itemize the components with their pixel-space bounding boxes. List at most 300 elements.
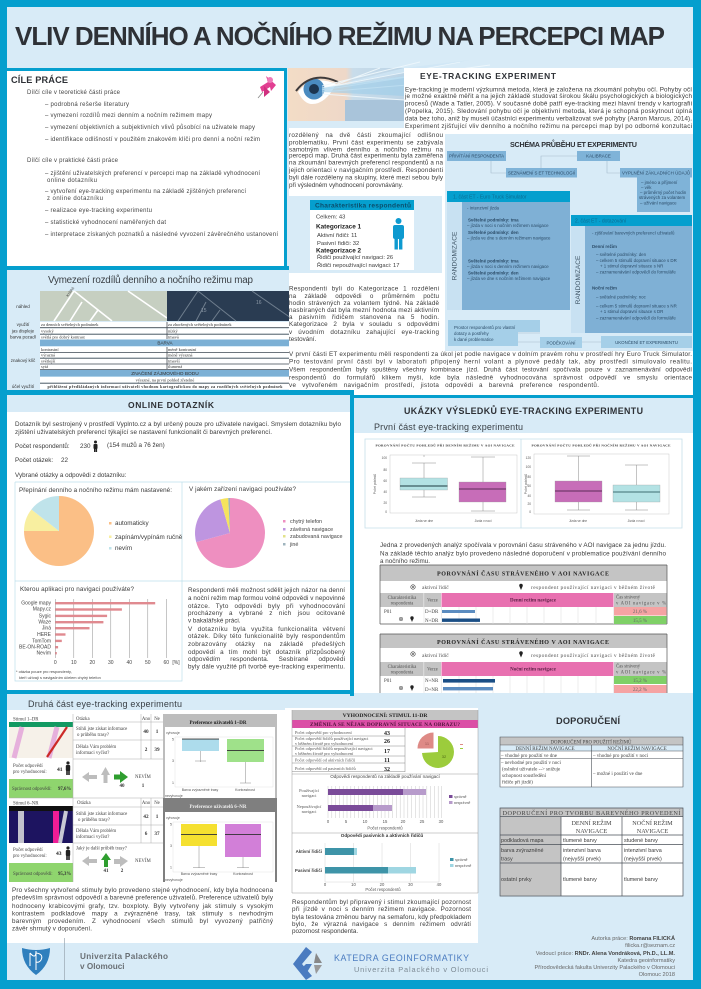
first ET part: Světelné podmínky: tma	[468, 218, 519, 222]
answers table: 43	[384, 731, 390, 737]
panel: charakteristika respondentů: Celkem: 43	[316, 214, 345, 220]
text block: experiment parts: samotným vlivem denního a nočního režimu na	[289, 146, 443, 153]
text block: intro: data bez toho, aniž by museli účastníci experimentu verbalizovat své pohyby (Aaron Marcus, 2014).	[405, 116, 692, 122]
text block: free answers	[188, 587, 346, 670]
stimulus 1-DR row: 1	[156, 729, 159, 735]
boxplot: denní režim: 40	[383, 490, 387, 494]
answers table: 11	[384, 758, 390, 764]
table: AOI noční režim: 22,2 %	[633, 688, 647, 693]
bar chart: drivers: Počet respondentů	[365, 887, 401, 892]
table: AOI denní režim	[380, 565, 667, 624]
text block: praktická část: – zjištění uživatelských preferencí v percepci map na základě vyhodnocení	[45, 171, 260, 177]
stimulus 6-NR row: Ano	[142, 801, 151, 806]
text block: stimuli evaluation	[12, 887, 274, 932]
boxplot: denní režim: 0	[385, 510, 387, 514]
stimulus 6-NR row: Ne	[154, 801, 160, 806]
heading: vymezení rozdílů: Vymezení rozdílů denního a nočního režimu map	[48, 275, 254, 286]
answers table: Počet odpovědí pro vyhodnocení	[295, 730, 352, 735]
second ET part: - zjišťování barevných preferencí uživatelů	[592, 230, 675, 236]
bar chart: drivers: 30	[408, 882, 413, 887]
text block: attention stimulus: při jízdě v noci s denním režimem navigace. Pozornost	[292, 906, 471, 913]
bar chart: navigation use: 5	[345, 819, 348, 824]
stimulus 1-DR row	[9, 714, 163, 798]
table: AOI noční režim: 15,2 %	[633, 679, 647, 684]
boxplot: preference 1-DR: 1	[172, 781, 174, 785]
closing boxes: k dané problematice	[454, 337, 494, 342]
bar chart: aplikace: 50	[145, 660, 151, 666]
comparison table: tlumená	[168, 364, 182, 369]
bar chart: aplikace: Waze	[38, 620, 51, 626]
text block: first part procedure	[289, 351, 692, 389]
boxplot: preference 6-NR	[163, 798, 277, 882]
bar chart: drivers: nesprávně	[455, 863, 471, 868]
bar chart: navigation use: navigaci	[302, 793, 317, 798]
answers table: 17	[384, 749, 390, 755]
text block: experiment parts	[288, 132, 444, 189]
boxplot: noční režim: Jízda ve dne	[569, 519, 587, 523]
table: barevné provedení: (nejvyšší prvek)	[624, 856, 662, 862]
answers table: v běžném životě pro vyhodnocení	[295, 751, 354, 756]
stimulus 6-NR row: 95,3%	[58, 872, 71, 877]
text block: kategorizace: Respondenti byli do Kategorizace 1 rozděleni	[289, 285, 439, 292]
step boxes: – jméno a příjmení	[641, 180, 678, 185]
pie chart: correct answers	[418, 732, 463, 768]
stimulus 6-NR row: o průběhu trasy?	[78, 817, 110, 823]
step boxes: – průměrný počet hodin	[640, 190, 687, 195]
boxplot: denní režim: Počet pohledů	[373, 474, 377, 494]
bar chart: drivers	[295, 832, 471, 892]
text block: attention stimulus: byla testována změnou barvy na semaforu, kdy předpokladem	[292, 914, 471, 921]
bar chart: drivers: 10	[351, 882, 356, 887]
pie chart: zařízení: chytrý telefon	[290, 519, 322, 525]
table: barevné provedení: trasy	[501, 856, 513, 862]
table: barevné provedení: intenzivní barva	[624, 848, 662, 854]
comparison table: výrazné, na první pohled zřetelné	[136, 378, 194, 384]
text block: free answers: Respondenti měli možnost sdělit jejich názor na denní	[188, 587, 345, 594]
table: barevné provedení: intenzivní barva	[563, 848, 601, 854]
table: AOI noční režim: Verze	[427, 668, 438, 672]
boxplot: preference 6-NR: vyhovuje	[166, 816, 180, 820]
text block: experiment parts: percepci map. Druhá část experimentu byla zaměřena	[289, 153, 443, 160]
stimulus 6-NR row: 43	[56, 851, 62, 857]
first ET part: 1. část ET - Euro Truck Simulator	[453, 194, 527, 200]
bar chart: aplikace: 60	[164, 660, 169, 666]
text block: stimuli evaluation: především správnost odpovědí a barevné preference uživatelů. Preference uživatelů byly	[12, 894, 274, 902]
pie chart: zařízení: zabudovaná navigace	[290, 534, 342, 540]
table: použití režimů: NOČNÍ REŽIM NAVIGACE	[607, 746, 667, 752]
table: AOI denní režim: POROVNÁNÍ ČASU STRÁVENÉHO V AOI NAVIGACE	[437, 570, 609, 578]
pie chart: zařízení: závěsná navigace	[290, 527, 333, 533]
comparison table: vysoký	[41, 328, 54, 334]
text block: experiment parts: při výsledném vyhodnocení porovnávány.	[289, 182, 403, 189]
boxplot: noční režim: 100	[526, 465, 531, 469]
text block: free answers: otázek. Díky této funkcionalitě byly respondentům	[188, 632, 345, 640]
icon: man	[66, 761, 70, 775]
panel: doporučení	[500, 715, 683, 978]
closing boxes: UKONČENÍ ET EXPERIMENTU	[615, 340, 678, 345]
comparison table	[10, 304, 291, 389]
table: AOI noční režim: P01	[384, 679, 392, 684]
table: AOI noční režim: respondent používající navigaci v běžném životě	[531, 653, 656, 659]
stimulus screenshot 1-DR	[9, 718, 73, 758]
respondents count: 230	[80, 443, 91, 450]
first ET part	[447, 191, 570, 310]
panel: charakteristika respondentů	[289, 196, 442, 273]
text block: free answers: odpovědím respondenta. Sesbírané odpovědi	[188, 656, 345, 663]
text block: attention stimulus: bylo, že výrazná navigace s denním režimem odvrátí	[292, 921, 471, 928]
table: AOI noční režim: Čas strávený	[616, 664, 641, 670]
answers table: Počet odpovědí od aktivních řidičů	[295, 758, 356, 762]
stimulus 6-NR row: Jaký je další průběh trasy?	[76, 846, 127, 852]
boxplot: preference 1-DR: nevyhovuje	[165, 794, 183, 798]
text block: stimuli evaluation: barevným provedením. Z vyhodnocení všech stimulů byl vyvozený patřičný	[12, 917, 274, 925]
footer logos	[22, 938, 488, 980]
panel: online dotazník	[7, 390, 354, 696]
bar chart: aplikace: 0	[54, 660, 57, 666]
boxplot: preference 6-NR: Preference uživatelů 6–NR	[189, 804, 247, 810]
step boxes: – věk	[641, 185, 652, 190]
bar chart: drivers: Odpovědi pasivních a aktivních řidičů	[341, 832, 423, 838]
boxplot: denní režim: 60	[383, 479, 387, 483]
boxplot: denní režim: POROVNÁNÍ POČTU POHLEDŮ PŘI DENNÍM REŽIMU V AOI NAVIGACE	[376, 442, 515, 448]
subheading: první část: První část eye-tracking experimentu	[374, 422, 523, 432]
text block: kategorizace	[289, 285, 439, 343]
logo: Univerzita Palackého: v Olomouci	[80, 962, 125, 971]
table: barevné provedení	[500, 808, 683, 896]
table: AOI denní režim: 21,6 %	[633, 610, 647, 615]
boxplot: preference 1-DR: vyhovuje	[166, 731, 180, 735]
text block: kategorizace: hodin strávených za volantem týdně. Na základě	[289, 300, 439, 307]
comparison table: BARVA	[157, 340, 174, 346]
text block: praktická část: – vytvoření eye-tracking experimentu na základě zjištěných preferencí	[45, 189, 246, 195]
text block: experiment parts: na zkoumání barevných preferencí respondentů a na	[289, 159, 443, 167]
comparison table: méně kontrastní	[168, 347, 197, 352]
text block: teoretická část: – podrobná rešerše literatury	[45, 102, 129, 108]
stimulus 1-DR row: 2	[145, 747, 148, 753]
boxplot: denní režim	[373, 442, 517, 523]
table: barevné provedení: NAVIGACE	[637, 828, 668, 835]
text block: AOI analysis: Jedna z provedených analýz spočívala v porovnání času stráveného v AOI navigace za jednu jízdu.	[380, 542, 666, 549]
diagram: schéma průběhu ET experimentu	[445, 135, 693, 351]
text block: description	[15, 421, 341, 436]
stimulus 6-NR row: 42	[143, 814, 149, 820]
bar chart: aplikace: Kterou aplikaci pro navigaci používáte?	[20, 586, 134, 593]
comparison table: tmavá	[168, 335, 179, 340]
comparison table: za denních světelných podmínek	[41, 322, 99, 327]
bar chart: aplikace: kteří užívají s navigačním účelem chytrý telefon	[19, 675, 101, 680]
heading: eye-tracking experiment: EYE-TRACKING EXPERIMENT	[420, 71, 557, 81]
text block: free answers: byly dále využité při tvorbě eye-tracking experimentu.	[188, 664, 345, 670]
table: použití režimů: – vhodné pro použití v noci	[592, 754, 649, 759]
bar chart: navigation use: Nepoužívající	[297, 804, 322, 809]
first ET part: Světelné podmínky: den	[468, 230, 519, 235]
boxplot: denní režim: Jízda v noci	[475, 519, 492, 523]
stimulus screenshot 1-DR: Stimul 1–DR	[13, 718, 39, 722]
text block: praktická část: z online dotazníku	[47, 196, 103, 202]
boxplot: preference 6-NR: Barva zvýrazněné trasy	[181, 872, 218, 876]
boxplot: noční režim: POROVNÁNÍ POČTU POHLEDŮ PŘI NOČNÍM REŽIMU V AOI NAVIGACE	[532, 442, 671, 448]
arrows	[82, 767, 151, 789]
bar chart: aplikace: [%]	[172, 660, 180, 666]
bar chart: aplikace: Jiná	[42, 626, 51, 632]
boxplot: noční režim	[524, 442, 671, 523]
table: AOI noční režim	[380, 634, 667, 693]
bar chart: navigation use: nesprávně	[454, 800, 470, 805]
comparison table: za zhoršených světelných podmínek	[168, 322, 232, 327]
stimulus 1-DR row: 39	[154, 747, 160, 753]
credits: Přírodovědecká fakulta Univerzity Palackého v Olomouci	[534, 965, 675, 971]
map preview: day	[40, 286, 167, 321]
stimulus 6-NR row: 37	[154, 831, 160, 837]
second ET part: + 1 stimul dopravní situace s DR	[600, 309, 663, 314]
bar chart: navigation use: Odpovědi respondentů na základě používání navigací	[330, 773, 441, 779]
table: použití režimů: – vhodné pro použití ve dne	[500, 754, 558, 759]
stimulus 6-NR row	[9, 798, 163, 882]
comparison table: výrazná	[41, 352, 55, 358]
text block: free answers: V dotazníku byla využita funkcionalita větvení	[188, 626, 345, 633]
second ET part: 2. část ET - dotazování	[575, 218, 627, 224]
table: barevné provedení: DENNÍ REŽIM	[571, 819, 612, 827]
first ET part: – jízda v noci s nočním režimem navigace	[467, 223, 549, 228]
bar chart: aplikace: 40	[127, 660, 132, 666]
panel: vyhodnocení stimul 11-DR	[292, 710, 478, 935]
table: AOI denní režim: P01	[384, 610, 392, 615]
bar chart: drivers: správně	[455, 857, 468, 862]
pie chart: přepínání režimu	[19, 487, 183, 566]
credits: filicka.r@seznam.cz	[625, 943, 675, 949]
table: barevné provedení: tlumené barvy	[563, 838, 597, 844]
bar chart: aplikace: * otázka pouze pro respondenty,	[16, 669, 72, 674]
text block: intro	[404, 86, 692, 130]
panel: charakteristika respondentů: Aktivní řidiči: 11	[317, 233, 357, 239]
text block: free answers: v bakalářské práci.	[188, 618, 241, 624]
text block: intro: Eye-tracking je moderní výzkumná metoda, která je založena na zkoumání pohybu očí. Pohyby očí	[405, 86, 692, 94]
table: barevné provedení: barva zvýrazněné	[501, 848, 544, 854]
boxplot: noční režim: Jízda v noci	[628, 519, 645, 523]
text block: intro: (Popelka, 2015). Sledování pohybu očí je objektivní metoda, která je schopná poskytnout úplná	[405, 108, 692, 115]
bar chart: aplikace: Nevím	[37, 650, 51, 656]
text block: stimuli evaluation: kontrastem podkladové mapy a zvýrazněné trasy, tak stimuly s nevhodným	[12, 910, 273, 918]
boxplot frames	[365, 439, 682, 528]
second ET part: – světelné podmínky: noc	[596, 294, 647, 300]
comparison table: ZNAČENÍ ZÁJMOVÉHO BODU	[131, 370, 199, 377]
second ET part: – celkem 5 stimulů dopravní situace s NR	[596, 304, 677, 308]
arrows: NEVÍM	[135, 774, 151, 780]
text block: first part procedure: respondentů do formulářů klikem myši, kde byla následně vyhodnocována správnost odpovědí ve smyslu orientace	[289, 373, 692, 381]
stimulus 1-DR row: Otázka	[76, 717, 90, 722]
closing boxes: dotazy a postřehy	[454, 331, 489, 336]
arrows: NEVÍM	[135, 858, 151, 864]
boxplot: denní režim: Jízda ve dne	[415, 519, 433, 523]
pie chart: zařízení: V jakém zařízení navigaci používáte?	[189, 486, 296, 493]
boxplot: preference 1-DR: Preference uživatelů 1–DR	[189, 720, 247, 726]
bar chart: navigation use: 30	[439, 819, 444, 824]
text block: stimuli evaluation: Pro všechny vytvořené stimuly bylo provedeno stejné vyhodnocení, kdy byla hodnocena	[12, 887, 273, 894]
text block: kategorizace: testování.	[289, 336, 317, 343]
stimulus 6-NR row: Stihli jste získat informace	[76, 812, 127, 817]
boxplot: noční režim: 120	[526, 456, 531, 460]
boxplot: noční režim: 20	[527, 502, 531, 506]
boxplot: noční režim: 80	[527, 475, 531, 479]
bar chart: navigation use: správně	[454, 794, 467, 799]
pie chart: correct answers: 32	[442, 754, 447, 759]
pie chart: přepínání režimu: automaticky	[115, 520, 149, 527]
bar chart: drivers: 20	[380, 882, 385, 887]
text block: AOI analysis: Na základě těchto analýz bylo provedeno následné doporučení v problematice používání denního	[380, 550, 666, 558]
stimulus 1-DR row: informaci vyčíst?	[76, 751, 109, 756]
table: AOI denní režim: D+DR	[425, 610, 439, 615]
bar chart: aplikace	[16, 586, 180, 680]
stimulus 1-DR row: 97,6%	[58, 787, 71, 792]
step boxes: SEZNÁMENÍ S ET TECHNOLOGIÍ	[508, 170, 576, 176]
icon: man	[66, 846, 70, 860]
boxplot: preference 6-NR: nevyhovuje	[165, 878, 183, 882]
bar chart: aplikace: Mapy.cz	[33, 606, 51, 612]
bar chart: navigation use: Počet respondentů	[367, 826, 403, 830]
text block: description: zjištění uživatelských preferencí týkající se nastavení funkcionalit či barevných preferencí.	[15, 429, 272, 436]
text block: attention stimulus: pozornost respondenta.	[292, 928, 358, 935]
pie chart: correct answers: 11	[425, 741, 430, 746]
text block: first part procedure: Všem respondentům byly spuštěny všechny kombinace jízd. Druhá část testování spočívala pouze v zaznamenávání odpovědí	[289, 365, 692, 373]
subheading: druhá část: Druhá část eye-tracking experimentu	[28, 699, 182, 709]
table: AOI noční režim: aktivní řidič	[422, 653, 449, 659]
bar chart: aplikace: Google mapy	[21, 600, 51, 606]
table: AOI denní režim: respondenta	[391, 602, 414, 606]
boxplot: preference 1-DR: Kontrastnost	[235, 788, 255, 792]
text block: free answers: a noční režim map formou volné odpovědi v nepovinné	[188, 595, 345, 602]
stimulus 6-NR row: pro vyhodnocení:	[13, 854, 47, 859]
table: použití režimů: DOPORUČENÍ PRO POUŽITÍ REŽIMŮ	[551, 740, 632, 746]
text block: teoretická část: Dílčí cíle v teoretické části práce	[27, 90, 121, 96]
comparison table: jas displeje	[11, 328, 35, 334]
answers table: v běžném životě pro vyhodnocení	[295, 741, 354, 746]
panel: charakteristika respondentů: Charakteristika respondentů	[315, 202, 411, 210]
table: AOI noční režim: respondenta	[391, 670, 414, 676]
first ET part: – jízda ve dne s nočním režimem navigace	[467, 276, 551, 281]
boxplot: preference 1-DR: 3	[172, 759, 174, 763]
boxplot: noční režim: 0	[529, 510, 531, 514]
panel: vymezení rozdílů	[7, 267, 295, 395]
text block: experiment parts: rozdělený na dvě části zkoumající odlišnou	[289, 132, 443, 139]
second ET part: RANDOMIZACE	[575, 255, 582, 304]
comparison table: přiblížení předkládaných informací uživateli vhodnou kartografickou do mapy za rozdílných světelných podmínek	[48, 384, 283, 389]
credits: Autorka práce: Romana FILICKÁ	[591, 935, 675, 942]
answers table	[292, 728, 405, 773]
text block: intro: Experiment zjišťující vliv denního a nočního režimu na percepci map byl po odborné konzultaci	[405, 123, 692, 130]
text block: description: Dotazník byl sestrojený v prostředí Vyplnto.cz a byl určený pouze pro uživatele navigací. Smyslem dotazníku bylo	[15, 421, 341, 428]
map preview: day: Krátká	[66, 286, 76, 298]
step boxes: VYPLNĚNÍ ZÁKLADNÍCH ÚDAJŮ	[622, 170, 690, 176]
text block: kategorizace: nasbíraných dat byla mezní hodnota mezi aktivním	[289, 307, 439, 314]
panel: charakteristika respondentů: Pasivní řidiči: 32	[317, 241, 359, 247]
table: AOI denní režim: Denní režim navigace	[510, 598, 557, 604]
boxplot: preference 6-NR: 1	[170, 866, 172, 870]
second ET part: – světelné podmínky: den	[596, 252, 647, 257]
arrows	[82, 853, 151, 874]
text block: teoretická část	[27, 90, 260, 143]
text block: free answers: procházeny a vybrané z nich jsou ocitované	[188, 610, 345, 617]
text block: kategorizace: a pasivním řidičem stanovena na 5 hodin.	[289, 314, 439, 321]
second ET part: Noční režim	[592, 286, 617, 290]
heading: cíle práce: CÍLE PRÁCE	[11, 74, 68, 85]
stimulus 6-NR row: 6	[145, 831, 148, 837]
comparison table: méně výrazná	[168, 352, 193, 358]
table: použití režimů: – nevhodné pro použití v noci	[500, 761, 561, 766]
table: barevné provedení: studené barvy	[624, 838, 658, 844]
panel: eye-tracking experiment	[288, 68, 693, 395]
chart frames	[15, 482, 350, 681]
pie chart: přepínání režimu: zapínám/vypínám ručně	[115, 534, 183, 541]
boxplot: denní režim: 100	[382, 456, 387, 460]
stimulus 6-NR row: 1	[156, 814, 159, 820]
comparison table: světlá pro dobrý kontrast	[41, 335, 86, 340]
panel: cíle práce	[7, 68, 295, 270]
arrows: 2	[121, 869, 124, 874]
comparison table: náhled	[16, 304, 30, 309]
table: použití režimů	[500, 737, 683, 787]
text block: teoretická část: – vymezení rozdílů mezi denním a nočním režimem mapy	[45, 112, 212, 119]
boxplot: denní režim: 20	[383, 501, 387, 505]
table: barevné provedení: DOPORUČENÍ PRO TVORBU BAREVNÉHO PROVEDENÍ	[502, 809, 680, 817]
bar chart: aplikace: Sygic	[39, 614, 51, 620]
comparison table: účel využití	[12, 384, 35, 389]
text block: stimuli evaluation: závěr shrnutý v doporučení.	[12, 926, 92, 932]
text block: kategorizace: Kategorizace 2 byla v souladu s odpovědmi	[289, 321, 439, 328]
second ET part: Denní režim	[592, 244, 617, 249]
table: AOI denní režim: respondent používající navigaci v běžném životě	[531, 585, 656, 591]
text block: first part procedure: V první části ET experimentu měli respondenti za úkol jet podle navigace v dolním pravém rohu v prostředí hry Euro Truck Simulator.	[289, 351, 692, 358]
comparison table: nízký	[168, 328, 179, 334]
table: AOI denní režim: Čas strávený	[616, 594, 641, 600]
bar chart: navigation use: 25	[420, 819, 425, 824]
text block: first part procedure: Pro testování první části byl v laboratoři připojený herní volant a plynové pedály tak, aby prostředí simulovalo realitu.	[289, 359, 692, 366]
pie chart: zařízení: jiné	[289, 542, 298, 548]
logo: Katedra geoinformatiky	[293, 947, 488, 980]
step boxes: strávených za volantem	[639, 195, 685, 200]
boxplot: preference 6-NR: 3	[170, 844, 172, 848]
stimulus 1-DR row: Stihli jste získat informace	[76, 727, 127, 732]
respondents count: (154 mužů a 76 žen)	[107, 441, 165, 449]
bar chart: drivers: 40	[437, 882, 442, 887]
answers table: Počet odpovědí řidičů používající navigaci	[295, 736, 369, 741]
table: barevné provedení: NAVIGACE	[576, 828, 607, 835]
stimulus 6-NR row: Správnost odpovědí:	[13, 872, 53, 877]
comparison table: kontrastní	[41, 347, 59, 352]
table: AOI noční režim: D+NR	[425, 688, 439, 693]
bar chart: navigation use: 0	[327, 819, 330, 824]
closing boxes	[448, 320, 692, 348]
bar chart: navigation use: navigaci	[302, 809, 317, 814]
first ET part: RANDOMIZACE	[452, 231, 458, 280]
map preview: night	[167, 291, 291, 321]
arrows: 1	[142, 784, 145, 789]
illustration: eye with gaze beams	[288, 60, 490, 121]
logo: Katedra geoinformatiky: Univerzita Palackého v Olomouci	[354, 965, 488, 974]
boxplot: preference 6-NR: 5	[170, 822, 172, 826]
map preview: night: 16	[256, 300, 262, 306]
table: AOI denní režim: Charakteristika	[388, 596, 417, 601]
title: VLIV DENNÍHO A NOČNÍHO REŽIMU NA PERCEPCI MAP	[15, 21, 665, 51]
pie chart: zařízení	[189, 486, 342, 568]
step boxes: – užívání navigace	[640, 200, 677, 206]
first ET part: - Intenzivní jízda	[467, 206, 500, 210]
text block: free answers: zobrazovány otázky na základě předešlých	[188, 641, 345, 648]
bar chart: aplikace: TomTom	[32, 638, 51, 644]
heading: online dotazník: ONLINE DOTAZNÍK	[128, 400, 215, 410]
stimulus screenshot 6-NR	[9, 802, 73, 843]
text block: attention stimulus	[292, 898, 471, 935]
map preview: night: 15	[201, 308, 207, 314]
